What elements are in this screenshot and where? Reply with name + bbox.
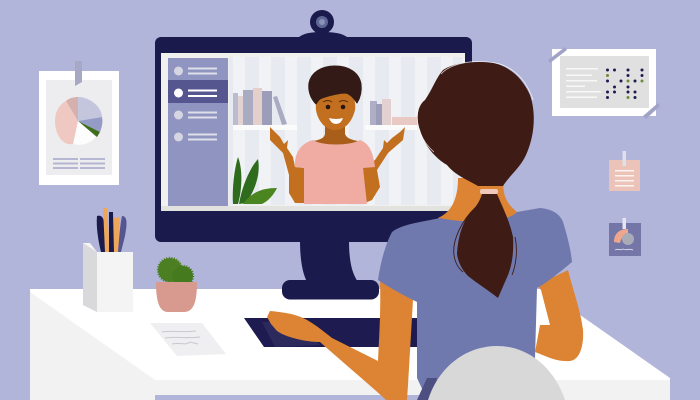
bookshelf right [365,99,418,130]
keyboard [244,318,418,347]
eyes and smile [323,100,348,124]
right arm [535,270,583,361]
face [316,88,355,130]
poster: dot grid [548,47,660,119]
icon: cactus in pot [156,258,197,312]
panel: desk [30,289,670,400]
ponytail [457,194,513,298]
hair [418,62,534,186]
monitor stand [282,240,379,300]
hair band [480,189,498,194]
note paper on desk [150,323,226,356]
chair back [417,346,565,400]
arms and hands [270,127,405,203]
shirt [295,140,375,204]
pink sticky note [609,151,640,191]
left arm and hand [267,280,413,400]
woman seen from behind [267,62,583,400]
plant [233,157,277,204]
icon: webcam [298,10,348,38]
sidebar menu [168,58,228,206]
neck [313,122,358,146]
person on screen [270,66,405,204]
poster: pie chart [39,61,119,185]
video call background: striped wall [229,57,462,205]
bookshelf left [233,88,297,130]
hair [309,66,361,104]
neck [438,178,517,230]
hair strands [417,62,533,152]
pie chart [55,97,102,145]
icon: pencil holder [83,208,133,312]
dark picture note [609,218,641,256]
shirt [378,208,572,395]
monitor [155,37,472,242]
